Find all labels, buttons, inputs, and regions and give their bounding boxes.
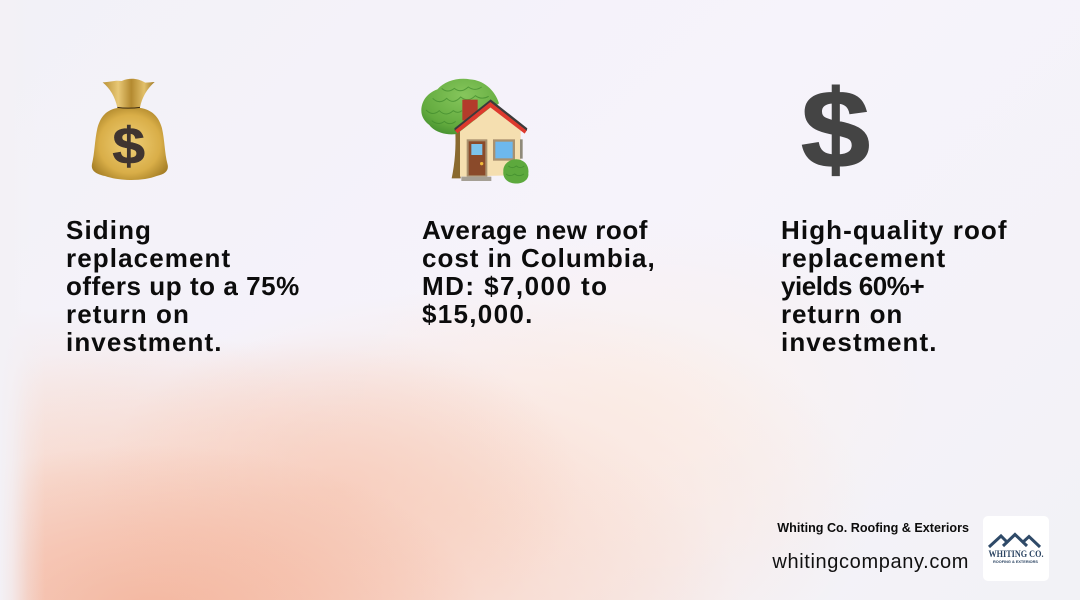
icon: money bag <box>92 78 168 180</box>
icon: grey dollar sign: $ <box>801 68 870 191</box>
stat text: siding replacement: return on <box>66 298 190 328</box>
stat text: roof replacement return: yields 60%+ <box>781 270 924 300</box>
roof dark edge <box>454 99 527 131</box>
logo card <box>983 516 1049 581</box>
house wall <box>460 107 521 177</box>
logo roof mark <box>989 534 1040 547</box>
stat text: siding replacement <box>66 214 300 356</box>
stat text: new roof cost: MD: $7,000 to <box>422 270 608 300</box>
stat text: siding replacement: replacement <box>66 242 231 272</box>
company name: Whiting Co. Roofing & Exteriors <box>777 521 969 535</box>
stat text: siding replacement: offers up to a 75% <box>66 270 300 300</box>
door <box>467 139 487 177</box>
stat text: new roof cost <box>422 214 656 328</box>
stat text: roof replacement return: investment. <box>781 326 938 356</box>
icon: house with tree <box>421 78 528 184</box>
roof red <box>455 102 527 134</box>
chimney <box>462 100 478 120</box>
stat text: new roof cost: cost in Columbia, <box>422 242 656 272</box>
dollar sign on bag: $ <box>112 116 145 175</box>
tree trunk <box>452 132 461 178</box>
bush <box>503 159 528 184</box>
door step <box>461 177 491 181</box>
stat text: roof replacement return <box>781 214 1008 356</box>
stat text: siding replacement: Siding <box>66 214 152 244</box>
window <box>493 139 515 161</box>
stat text: new roof cost: Average new roof <box>422 214 648 244</box>
website address: whitingcompany.com <box>772 550 969 572</box>
stat text: new roof cost: $15,000. <box>422 298 534 328</box>
stat text: roof replacement return: High-quality roof <box>781 214 1008 244</box>
stat text: roof replacement return: replacement <box>781 242 946 272</box>
logo tagline: ROOFING & EXTERIORS <box>993 560 1038 564</box>
stat text: siding replacement: investment. <box>66 326 223 356</box>
tree canopy <box>421 79 499 134</box>
stat text: roof replacement return: return on <box>781 298 903 328</box>
